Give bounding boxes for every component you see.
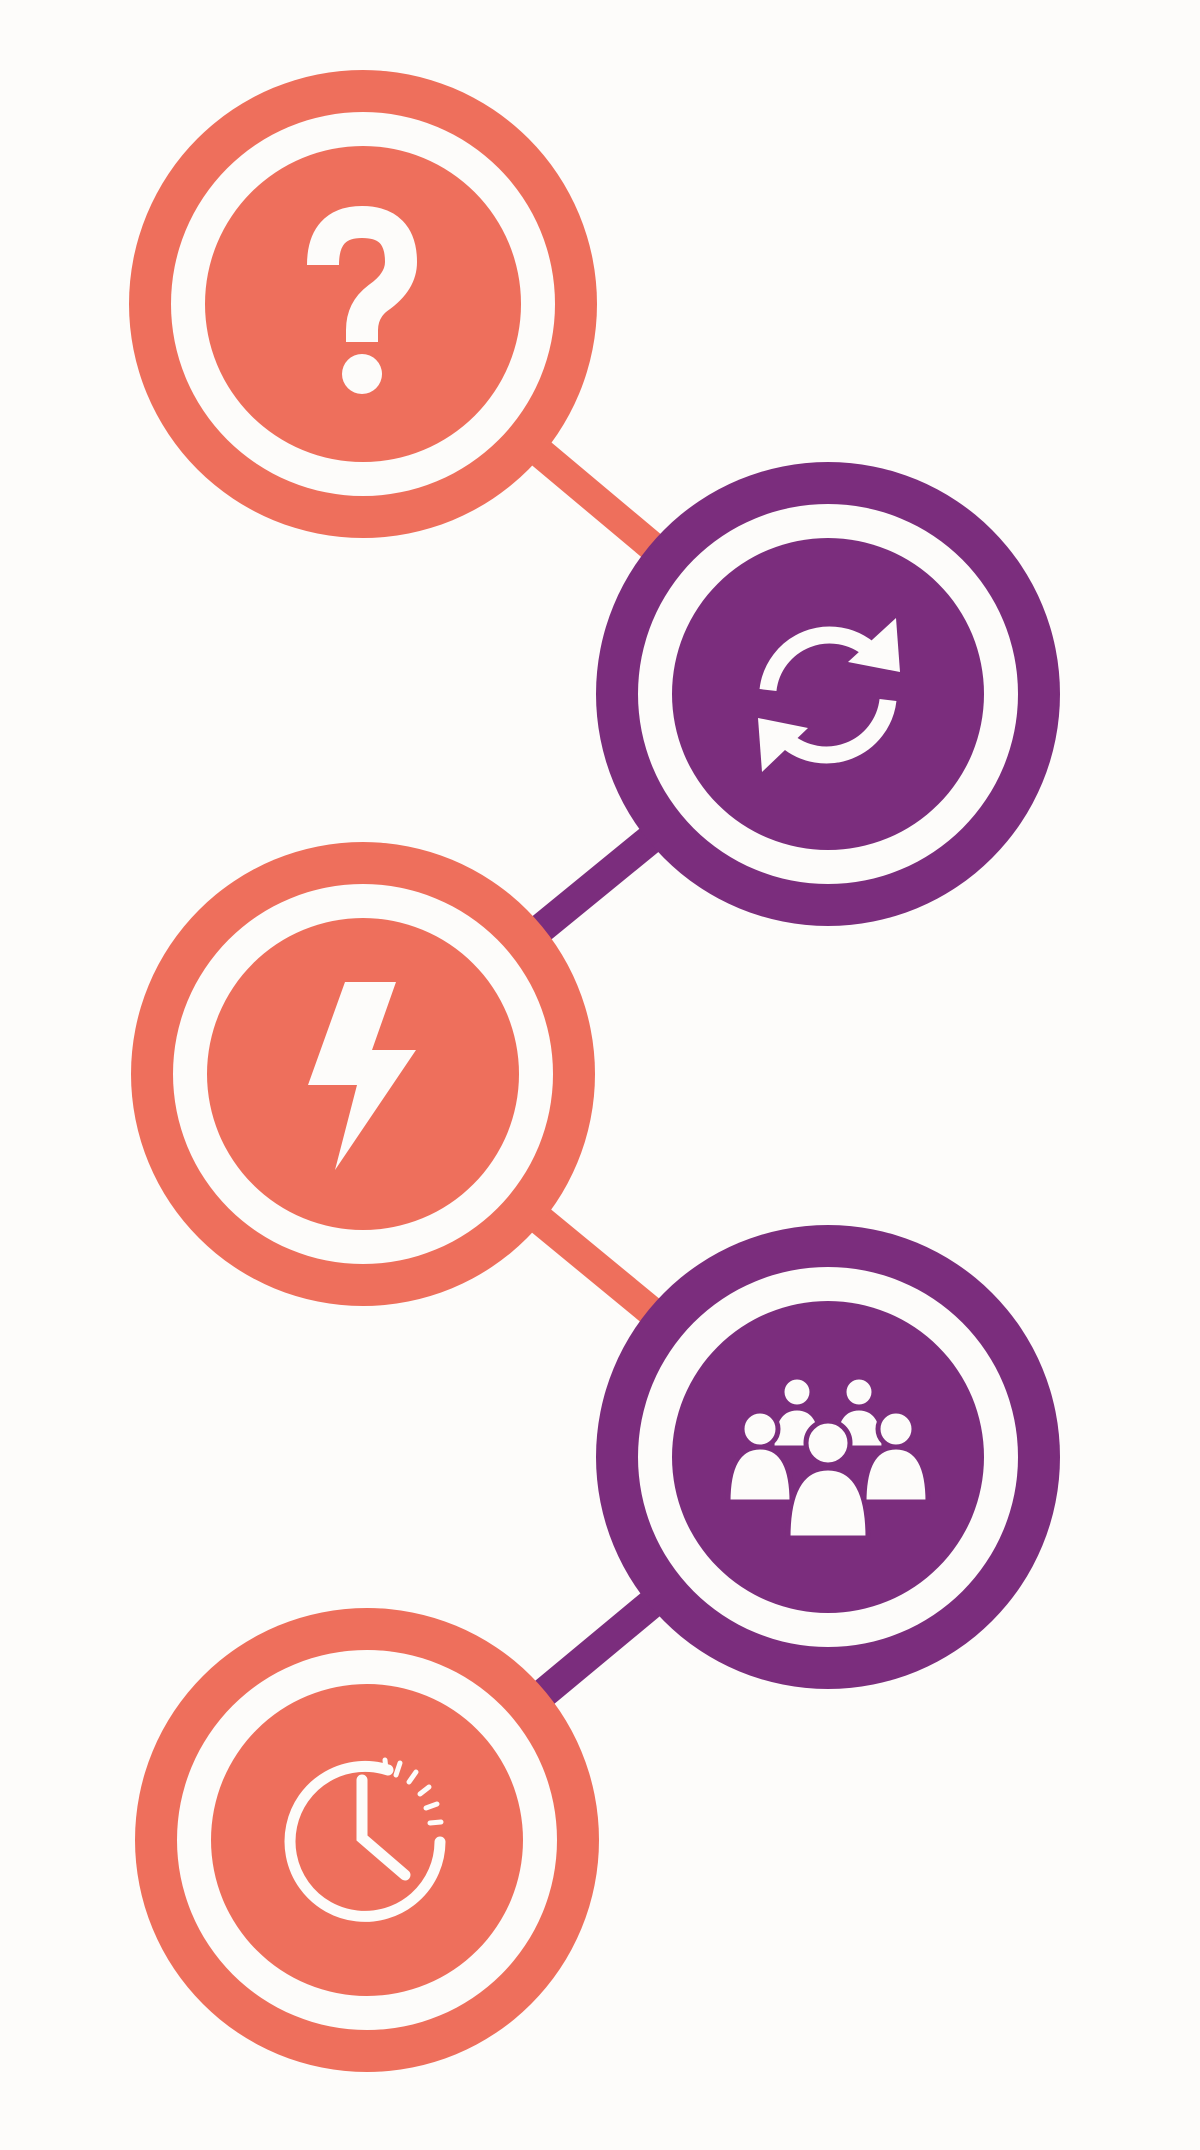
icon: question mark [323, 222, 401, 394]
icon: lightning bolt [308, 982, 416, 1170]
connector: node 4 to node 5 [367, 1457, 828, 1840]
icon: clock with speed ticks [290, 1766, 440, 1916]
node 2: refresh [596, 462, 1060, 926]
connector: node 1 to node 2 [363, 304, 828, 694]
icon: refresh arrows [768, 635, 888, 755]
node 5: stopwatch [135, 1608, 599, 2072]
connector: node 3 to node 4 [363, 1074, 828, 1457]
node 3: lightning [131, 842, 595, 1306]
connector: node 2 to node 3 [363, 694, 828, 1074]
node 4: people [596, 1225, 1060, 1689]
icon: group of people [728, 1377, 928, 1538]
node 1: question [129, 70, 597, 538]
